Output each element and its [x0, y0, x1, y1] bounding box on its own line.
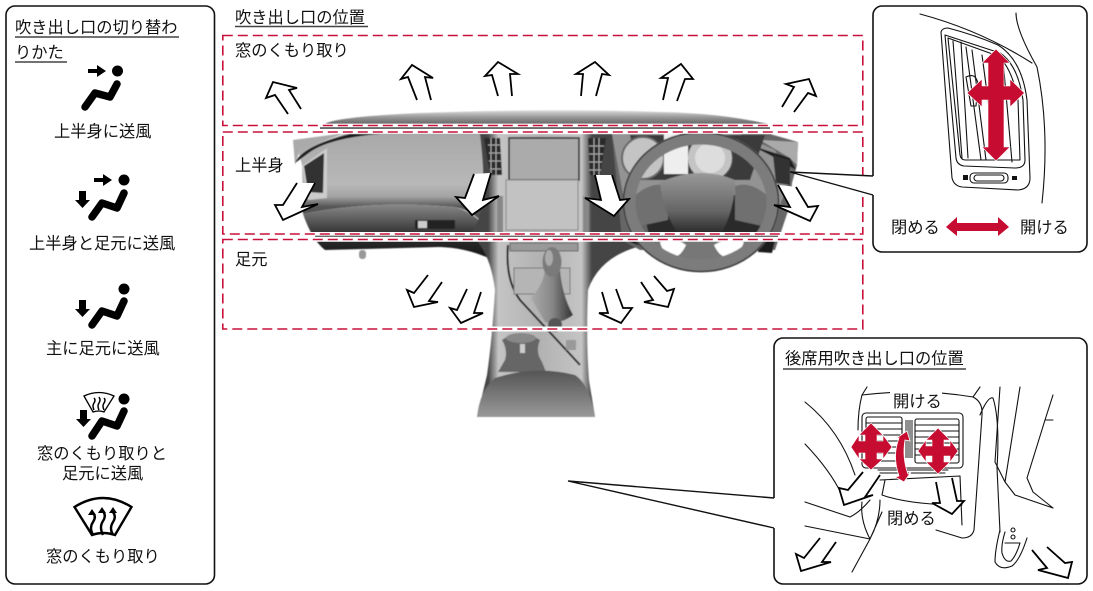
heading: switching modes: 吹き出し口の切り替わ [15, 19, 178, 37]
panel: rear vent detail [774, 338, 1087, 584]
illustration: dashboard [225, 110, 860, 417]
zone: defrost [223, 36, 863, 126]
heading: vent positions: 吹き出し口の位置 [235, 9, 365, 27]
icon: mainly feet [75, 284, 130, 325]
panel: front vent detail [873, 6, 1087, 252]
arrows: feet airflow [407, 275, 674, 323]
callout lines: rear vent [568, 481, 774, 528]
red cross: left [851, 423, 892, 470]
label: defrost zone: 窓のくもり取り [235, 42, 349, 60]
zone: upper body [223, 132, 863, 234]
red four-way arrow [967, 49, 1024, 161]
label: rear close: 閉める [887, 510, 936, 528]
icon: upper body and feet [75, 174, 130, 217]
arrows: defrost airflow [266, 62, 816, 114]
label: defrost and feet: 足元に送風 [62, 465, 143, 483]
label: close: 閉める [891, 219, 940, 237]
red curved arrow [895, 431, 911, 482]
icon: upper body [85, 65, 123, 107]
rear console lines [805, 387, 1053, 572]
red cross: right [918, 428, 958, 474]
red open-close arrow [946, 217, 1009, 236]
label: rear open: 開ける [893, 393, 942, 411]
heading: rear vents: 後席用吹き出し口の位置 [785, 350, 964, 368]
zone: feet [223, 240, 863, 329]
label: upper zone: 上半身 [235, 157, 284, 175]
icon: defrost and feet [76, 392, 130, 436]
rear airflow arrows [796, 472, 1072, 578]
label: upper body and feet: 上半身と足元に送風 [29, 235, 175, 253]
label: open: 開ける [1020, 219, 1069, 237]
arrows: upper body airflow [275, 173, 818, 221]
panel: switching modes [6, 6, 214, 584]
callout lines: front vent [790, 172, 873, 195]
icon: defrost [74, 498, 132, 535]
heading: switching modes: りかた [15, 44, 64, 62]
label: defrost and feet: 窓のくもり取りと [37, 445, 167, 463]
label: feet zone: 足元 [235, 251, 268, 269]
label: defrost and feet [37, 445, 167, 483]
rear vent unit [862, 413, 963, 473]
label: upper body: 上半身に送風 [54, 123, 152, 141]
surrounding trim lines [920, 13, 1045, 203]
heading: switching modes [15, 19, 179, 62]
label: mainly feet: 主に足元に送風 [46, 340, 160, 358]
label: defrost: 窓のくもり取り [46, 548, 160, 566]
vent illustration [941, 28, 1030, 190]
